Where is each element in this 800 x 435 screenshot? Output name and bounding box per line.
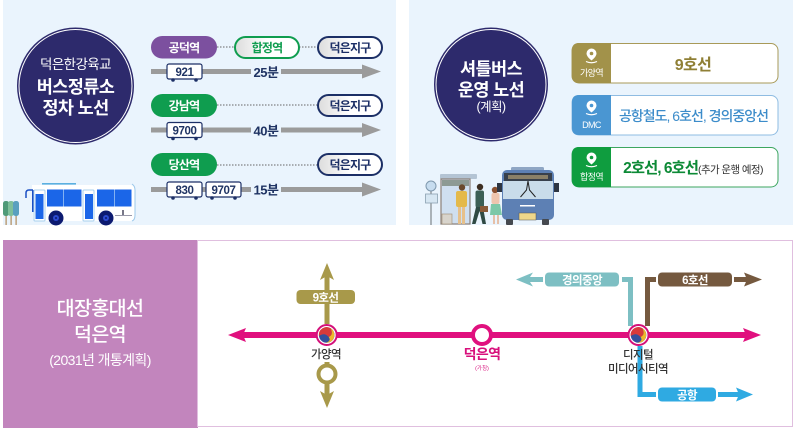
- panel: 대장홍대선 덕은역: 덕은역: [74, 324, 126, 346]
- route row: 강남역 덕은지구: [151, 94, 382, 140]
- route row: 공덕역 합정역 덕은지구: 921: [176, 67, 194, 79]
- line: 공항: [640, 346, 753, 402]
- route row: 공덕역 합정역 덕은지구: 합정역: [252, 40, 282, 55]
- badge: bus stop routes heading: [17, 28, 134, 144]
- route row: 강남역 덕은지구: 강남역: [169, 99, 199, 113]
- station: 디지털미디어시티역: 디지털: [623, 348, 653, 362]
- badge: bus stop routes heading: 버스정류소: [37, 77, 115, 97]
- line: 6호선: 6호선: [682, 274, 708, 287]
- route row: 공덕역 합정역 덕은지구: 덕은지구: [330, 41, 371, 55]
- station: 디지털미디어시티역: 미디어시티역: [608, 362, 668, 376]
- icon: white city bus: [26, 183, 135, 226]
- line: 경의중앙: [516, 272, 630, 326]
- icon: bus stop sign: [426, 181, 438, 225]
- route row: 강남역 덕은지구: 덕은지구: [330, 99, 371, 113]
- card: 합정역 2호선 6호선: [572, 147, 778, 187]
- panel: 대장홍대선 덕은역: [3, 240, 198, 428]
- card: 가양역 9호선: 가양역: [580, 68, 603, 78]
- line: 공항: 공항: [677, 388, 698, 402]
- route row: 당산역 덕은지구: 덕은지구: [330, 158, 371, 172]
- badge: bus stop routes heading: 정차 노선: [42, 98, 109, 118]
- route row: 당산역 덕은지구: 15분: [254, 182, 279, 198]
- icon: waiting passengers: [456, 184, 502, 224]
- icon: blue shuttle bus: [497, 167, 559, 225]
- station: 덕은역: 덕은역: [464, 346, 500, 362]
- station: 가양역: 가양역: [311, 348, 341, 361]
- icon: location pin: [586, 48, 597, 63]
- icon: trees: [3, 201, 19, 225]
- card: 합정역 2호선 6호선: 합정역: [580, 172, 603, 182]
- line: 9호선: 9호선: [313, 292, 338, 304]
- route row: 당산역 덕은지구: [151, 153, 382, 200]
- route row: 공덕역 합정역 덕은지구: [151, 36, 382, 82]
- panel: route map: [198, 240, 792, 426]
- route row: 공덕역 합정역 덕은지구: 25분: [254, 65, 279, 80]
- card: 합정역 2호선 6호선: 2호선, 6호선(추가 운행 예정): [623, 159, 763, 177]
- panel: 대장홍대선 덕은역: 대장홍대선: [57, 298, 143, 320]
- route row: 강남역 덕은지구: 40분: [254, 124, 279, 138]
- line: 대장홍대선 main arrow: [228, 328, 761, 342]
- route row: 당산역 덕은지구: 830: [176, 185, 194, 197]
- panel: bus stop routes: [3, 0, 396, 226]
- card: 가양역 9호선: 9호선: [675, 56, 711, 74]
- station: 덕은역: (가칭): [475, 364, 489, 372]
- station: 디지털미디어시티역: [608, 325, 668, 376]
- panel: 대장홍대선 덕은역: (2031년 개통계획): [49, 352, 151, 368]
- card: DMC 공항철도 6호선 경의중앙선: DMC: [582, 120, 602, 130]
- route row: 당산역 덕은지구: 당산역: [169, 158, 199, 172]
- line: 6호선: [648, 272, 762, 326]
- card: DMC 공항철도 6호선 경의중앙선: [572, 95, 778, 135]
- card: DMC 공항철도 6호선 경의중앙선: 공항철도, 6호선, 경의중앙선: [619, 108, 768, 124]
- badge: shuttle bus heading: 운영 노선: [458, 80, 524, 100]
- route row: 강남역 덕은지구: 9700: [173, 126, 196, 138]
- route row: 당산역 덕은지구: 9707: [212, 185, 235, 197]
- line: 경의중앙: 경의중앙: [562, 273, 603, 287]
- icon: location pin: [586, 152, 597, 167]
- station: 가양역: [311, 325, 341, 361]
- badge: shuttle bus heading: (계획): [477, 100, 506, 114]
- route row: 공덕역 합정역 덕은지구: 공덕역: [169, 41, 199, 55]
- icon: location pin: [586, 100, 597, 115]
- card: 가양역 9호선: [572, 43, 778, 83]
- line: 9호선: [296, 263, 355, 408]
- badge: shuttle bus heading: [434, 28, 548, 142]
- badge: shuttle bus heading: 셔틀버스: [460, 59, 522, 79]
- icon: bus shelter: [440, 174, 477, 224]
- panel: shuttle bus routes: [409, 0, 793, 225]
- station: 덕은역: [464, 326, 500, 372]
- badge: bus stop routes heading: 덕은한강육교: [40, 57, 111, 72]
